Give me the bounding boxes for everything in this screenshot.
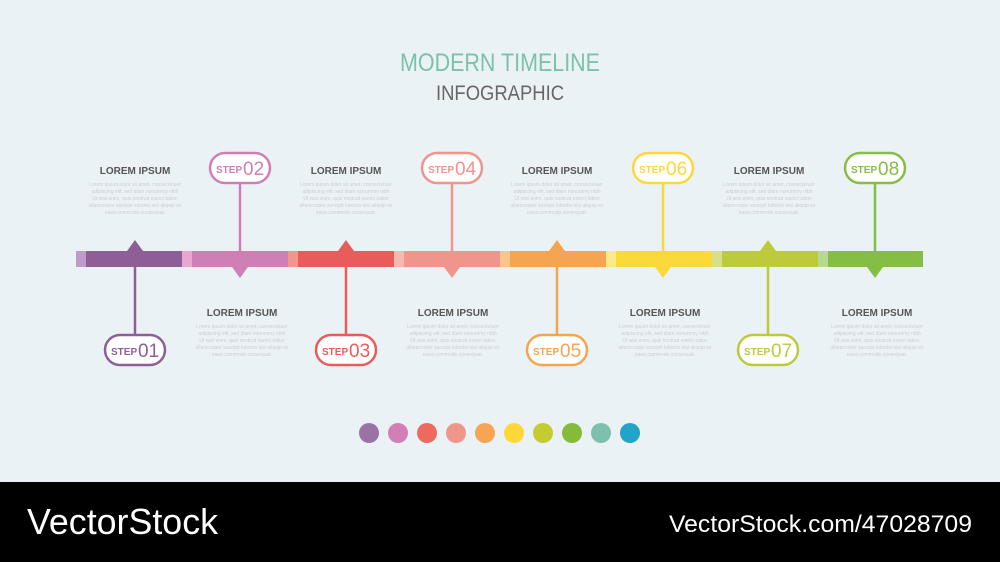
timeline bar <box>76 251 923 267</box>
step 08 marker: 08 <box>878 159 899 180</box>
text block 6: Ut wisi enim, quis nostrud exerci tation <box>622 338 708 344</box>
text block 8: ullamcorper suscipit lobortis nisl aliquip ex <box>830 345 924 351</box>
text block 4: adipiscing elit, sed diam nonummy nibh <box>409 331 497 337</box>
step 01 marker: STEP <box>111 347 137 358</box>
step 03 marker: 03 <box>349 341 370 362</box>
text block 4 <box>406 308 500 358</box>
step 04 marker <box>422 153 482 278</box>
step 02 marker <box>210 153 270 278</box>
text block 4: eaea commodo consequat. <box>423 352 483 358</box>
step 07 marker <box>738 240 798 365</box>
step 06 marker <box>633 153 693 278</box>
text block 8: LOREM IPSUM <box>842 308 912 319</box>
text block 7: eaea commodo consequat. <box>739 210 799 216</box>
footer: VectorStock.com/47028709 <box>669 511 972 538</box>
text block 5: Lorem ipsum dolor sit amet, consectetuer <box>511 182 603 188</box>
step 02 marker: 02 <box>243 159 264 180</box>
text block 5: ullamcorper suscipit lobortis nisl aliquip ex <box>510 203 604 209</box>
text block 8: Ut wisi enim, quis nostrud exerci tation <box>834 338 920 344</box>
text block 6: eaea commodo consequat. <box>635 352 695 358</box>
text block 1: ullamcorper suscipit lobortis nisl aliquip ex <box>88 203 182 209</box>
step 01 marker <box>105 240 165 365</box>
title: INFOGRAPHIC <box>436 82 564 105</box>
text block 7: Ut wisi enim, quis nostrud exerci tation <box>726 196 812 202</box>
text block 3: eaea commodo consequat. <box>316 210 376 216</box>
text block 4: Lorem ipsum dolor sit amet, consectetuer <box>407 324 499 330</box>
text block 3 <box>299 166 393 216</box>
text block 3: ullamcorper suscipit lobortis nisl aliquip ex <box>299 203 393 209</box>
text block 1: Lorem ipsum dolor sit amet, consectetuer <box>89 182 181 188</box>
text block 2: Ut wisi enim, quis nostrud exerci tation <box>199 338 285 344</box>
text block 8: Lorem ipsum dolor sit amet, consectetuer <box>831 324 923 330</box>
step 04 marker: 04 <box>455 159 477 180</box>
step 03 marker <box>316 240 376 365</box>
step 01 marker: 01 <box>138 341 159 362</box>
step 06 marker: 06 <box>666 159 687 180</box>
text block 1 <box>88 166 182 216</box>
text block 3: adipiscing elit, sed diam nonummy nibh <box>302 189 390 195</box>
step 02 marker: STEP <box>216 165 242 176</box>
text block 1: Ut wisi enim, quis nostrud exerci tation <box>92 196 178 202</box>
text block 8: adipiscing elit, sed diam nonummy nibh <box>833 331 921 337</box>
text block 8: eaea commodo consequat. <box>847 352 907 358</box>
color dots <box>359 423 640 443</box>
text block 3: Lorem ipsum dolor sit amet, consectetuer <box>300 182 392 188</box>
text block 5: LOREM IPSUM <box>522 166 592 177</box>
text block 6: LOREM IPSUM <box>630 308 700 319</box>
text block 6: adipiscing elit, sed diam nonummy nibh <box>621 331 709 337</box>
text block 1: eaea commodo consequat. <box>105 210 165 216</box>
text block 6 <box>618 308 712 358</box>
step 07 marker: 07 <box>771 341 792 362</box>
text block 1: adipiscing elit, sed diam nonummy nibh <box>91 189 179 195</box>
text block 7: Lorem ipsum dolor sit amet, consectetuer <box>723 182 815 188</box>
text block 2: adipiscing elit, sed diam nonummy nibh <box>198 331 286 337</box>
text block 2: Lorem ipsum dolor sit amet, consectetuer <box>196 324 288 330</box>
text block 4: LOREM IPSUM <box>418 308 488 319</box>
text block 3: Ut wisi enim, quis nostrud exerci tation <box>303 196 389 202</box>
footer: VectorStock <box>27 501 219 542</box>
text block 5: Ut wisi enim, quis nostrud exerci tation <box>514 196 600 202</box>
text block 6: ullamcorper suscipit lobortis nisl aliquip ex <box>618 345 712 351</box>
text block 4: Ut wisi enim, quis nostrud exerci tation <box>410 338 496 344</box>
text block 2 <box>195 308 289 358</box>
text block 7: adipiscing elit, sed diam nonummy nibh <box>725 189 813 195</box>
text block 7: LOREM IPSUM <box>734 166 804 177</box>
text block 2: eaea commodo consequat. <box>212 352 272 358</box>
step 04 marker: STEP <box>428 165 454 176</box>
text block 6: Lorem ipsum dolor sit amet, consectetuer <box>619 324 711 330</box>
title <box>400 49 600 105</box>
text block 5: adipiscing elit, sed diam nonummy nibh <box>513 189 601 195</box>
text block 2: LOREM IPSUM <box>207 308 277 319</box>
text block 1: LOREM IPSUM <box>100 166 170 177</box>
text block 8 <box>830 308 924 358</box>
step 08 marker <box>845 153 905 278</box>
text block 3: LOREM IPSUM <box>311 166 381 177</box>
text block 5 <box>510 166 604 216</box>
text block 2: ullamcorper suscipit lobortis nisl aliquip ex <box>195 345 289 351</box>
text block 7 <box>722 166 816 216</box>
step 06 marker: STEP <box>639 165 665 176</box>
step 03 marker: STEP <box>322 347 348 358</box>
step 05 marker: 05 <box>560 341 581 362</box>
title: MODERN TIMELINE <box>400 49 600 77</box>
text block 7: ullamcorper suscipit lobortis nisl aliquip ex <box>722 203 816 209</box>
step 07 marker: STEP <box>744 347 770 358</box>
step 05 marker: STEP <box>533 347 559 358</box>
footer <box>0 482 1000 562</box>
step 08 marker: STEP <box>851 165 877 176</box>
text block 5: eaea commodo consequat. <box>527 210 587 216</box>
step 05 marker <box>527 240 587 365</box>
text block 4: ullamcorper suscipit lobortis nisl aliquip ex <box>406 345 500 351</box>
